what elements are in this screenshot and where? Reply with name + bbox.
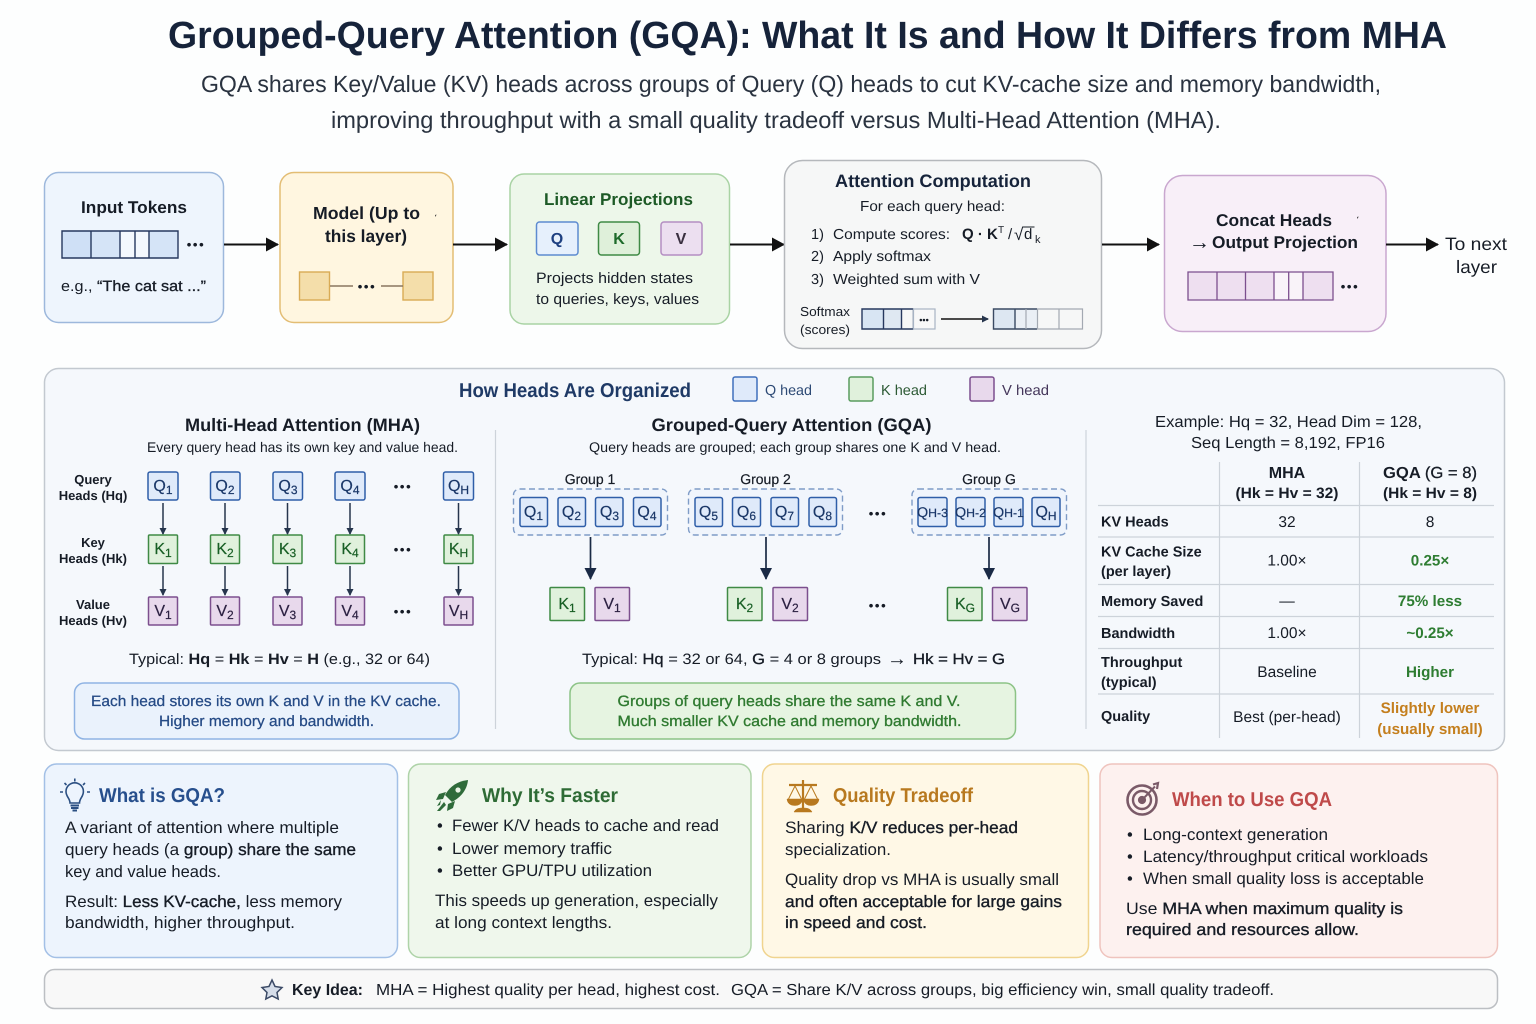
- legend: Q head: [765, 383, 812, 399]
- row: quality: [1101, 700, 1483, 738]
- row: KV heads: 32: [1278, 514, 1296, 531]
- body text: key and value heads.: [65, 863, 221, 881]
- label: to next layer: [1445, 234, 1507, 277]
- arrow: tokens to model: [224, 244, 278, 246]
- shared KV pair 1: 1: [569, 601, 576, 615]
- steps: Apply softmax: [833, 249, 932, 265]
- steps: d: [1024, 226, 1032, 243]
- card: quality tradeoff: Quality Tradeoff: [833, 785, 973, 807]
- legend: V head: [1002, 383, 1049, 399]
- group 1: 4: [650, 509, 657, 523]
- panel: linear projections: to queries, keys, values: [536, 291, 699, 308]
- section heading: How Heads Are Organized: [459, 380, 691, 402]
- body text: and often acceptable for large gains: [785, 893, 1062, 911]
- icon: star: [262, 980, 282, 999]
- steps: √: [1014, 225, 1024, 244]
- GQA callout: Groups of query heads share the same K and V.: [618, 693, 960, 710]
- panel: model up to this layer: Model (Up to: [313, 203, 420, 223]
- MHA value heads: •••: [394, 604, 412, 619]
- layer blocks: •••: [358, 279, 376, 294]
- key idea bar: GQA = Share K/V across groups, big efficiency win, small quality tradeoff.: [731, 982, 1274, 999]
- MHA key heads: [148, 535, 473, 564]
- GQA typical note: [582, 648, 1005, 670]
- row: KV heads: [1101, 514, 1434, 531]
- MHA column: Multi-Head Attention (MHA): [185, 415, 420, 435]
- icon: balance scales: [787, 780, 819, 812]
- subtitle: improving throughput with a small quality tradeoff versus Multi-Head Attention (MHA).: [331, 107, 1221, 133]
- row labels: Value: [76, 597, 110, 612]
- GQA callout: Much smaller KV cache and memory bandwidth.: [618, 713, 962, 730]
- softmax diagram: Softmax: [800, 304, 851, 319]
- MHA key heads: K: [449, 541, 460, 558]
- table header: [1236, 465, 1477, 502]
- MHA query heads: 2: [228, 483, 235, 497]
- MHA callout: Each head stores its own K and V in the KV cache.: [91, 693, 441, 710]
- body text: Quality drop vs MHA is usually small: [785, 871, 1059, 889]
- group G: QH-2: [955, 504, 986, 520]
- icon: target: [1128, 783, 1158, 814]
- key idea bar: MHA = Highest quality per head, highest cost.: [376, 982, 720, 999]
- row: memory saved: [1101, 593, 1462, 610]
- shared KV pair G: G: [1011, 601, 1020, 615]
- body text: bandwidth, higher throughput.: [65, 914, 295, 932]
- softmax diagram: •••: [919, 315, 929, 325]
- card: when to use GQA: [1100, 764, 1498, 958]
- Q K V chips: K: [613, 231, 625, 248]
- steps: /: [1008, 226, 1013, 243]
- MHA value heads: [148, 597, 473, 625]
- MHA query heads: Q: [448, 478, 460, 495]
- bullet list: •: [1127, 826, 1133, 844]
- shared KV pair 1: 1: [614, 601, 621, 615]
- MHA key heads: H: [460, 546, 468, 560]
- panel: model up to this layer: [280, 172, 453, 322]
- MHA value heads: V: [449, 603, 460, 620]
- bullet list: •: [1127, 848, 1133, 866]
- steps: 2): [811, 249, 824, 265]
- GQA column: Query heads are grouped; each group shares one K and V head.: [589, 439, 1001, 455]
- MHA query heads: 3: [291, 483, 298, 497]
- row: throughput: Higher: [1406, 664, 1454, 681]
- GQA column: •••: [869, 506, 887, 521]
- steps: [811, 225, 1041, 288]
- row labels: [59, 472, 127, 628]
- card: quality tradeoff: [762, 764, 1088, 958]
- row labels: Query: [74, 472, 113, 487]
- steps: 3): [811, 272, 824, 288]
- card: what is GQA: What is GQA?: [99, 785, 225, 807]
- label: to next layer: layer: [1456, 257, 1497, 277]
- row: KV heads: KV Heads: [1101, 514, 1169, 530]
- body text: specialization.: [785, 841, 891, 859]
- row labels: Heads (Hq): [59, 488, 127, 503]
- MHA value heads: 2: [227, 608, 234, 622]
- body text: [785, 819, 1062, 932]
- Q K V chips: [536, 222, 702, 255]
- MHA value heads: V: [216, 603, 227, 620]
- panel: concat heads: Concat Heads: [1216, 211, 1332, 230]
- MHA column: [59, 415, 474, 739]
- token bar: [62, 231, 205, 258]
- arrow: attention to concat: [1102, 244, 1159, 246]
- row: throughput: Throughput: [1101, 655, 1183, 671]
- group 2: [688, 471, 842, 535]
- GQA column: [514, 415, 1066, 739]
- row: throughput: Baseline: [1257, 664, 1317, 681]
- body text: This speeds up generation, especially: [435, 892, 719, 910]
- shared KV pair G: [948, 588, 1027, 620]
- GQA column: Grouped-Query Attention (GQA): [652, 415, 932, 435]
- softmax diagram: [800, 304, 1082, 337]
- steps: 1): [811, 227, 824, 243]
- example comparison table: [1098, 414, 1494, 738]
- MHA query heads: [148, 472, 474, 500]
- bullet list: Fewer K/V heads to cache and read: [452, 817, 719, 835]
- Q K V chips: Q: [551, 231, 563, 248]
- panel: linear projections: Projects hidden states: [536, 270, 693, 287]
- MHA value heads: 4: [352, 608, 359, 622]
- MHA query heads: •••: [394, 479, 412, 494]
- icon: rocket: [436, 780, 468, 811]
- group 1: Q: [637, 504, 650, 521]
- MHA callout: Higher memory and bandwidth.: [159, 713, 374, 730]
- legend: [733, 377, 1049, 401]
- body text: [1126, 900, 1403, 939]
- table header: (Hk = Hv = 8): [1383, 485, 1477, 502]
- row: bandwidth: 1.00×: [1267, 625, 1307, 642]
- panel: linear projections: [510, 174, 730, 324]
- MHA key heads: K: [341, 541, 352, 558]
- row: KV cache size: 0.25×: [1411, 552, 1449, 570]
- shared KV pair G: K: [955, 596, 966, 613]
- example comparison table: Example: Hq = 32, Head Dim = 128,: [1155, 414, 1422, 431]
- group G: QH-3: [917, 504, 948, 520]
- MHA query heads: H: [460, 483, 469, 497]
- panel: attention computation: Attention Computation: [835, 171, 1031, 191]
- panel: concat heads: Output Projection: [1212, 233, 1358, 252]
- GQA typical note: Typical: Hq = 32 or 64, G = 4 or 8 groups: [582, 651, 881, 668]
- row: quality: (usually small): [1377, 721, 1483, 738]
- bullet list: Long-context generation: [1143, 826, 1328, 844]
- group G: [912, 471, 1066, 535]
- body text: required and resources allow.: [1126, 921, 1359, 939]
- key idea bar: [44, 970, 1498, 1008]
- row: KV cache size: KV Cache Size: [1101, 544, 1202, 560]
- panel: concat heads: →: [1189, 231, 1210, 254]
- shared KV pair G: G: [966, 601, 975, 615]
- bullet list: •: [437, 840, 443, 858]
- icon: light bulb: [60, 778, 90, 810]
- panel: input tokens: e.g., “The cat sat ...”: [61, 278, 206, 295]
- shared KV pair 2: 2: [792, 601, 799, 615]
- MHA key heads: 1: [165, 546, 172, 560]
- bullet list: •: [437, 862, 443, 880]
- example comparison table: Seq Length = 8,192, FP16: [1191, 435, 1385, 452]
- row: memory saved: Memory Saved: [1101, 594, 1203, 610]
- group 2: Q: [699, 504, 711, 521]
- body text: Use MHA when maximum quality is: [1126, 900, 1403, 918]
- panel: how heads are organized: [44, 368, 1504, 750]
- group 1: Group 1: [565, 471, 616, 487]
- steps: k: [1035, 234, 1041, 246]
- group 1: 2: [574, 509, 581, 523]
- bullet list: •: [1127, 870, 1133, 888]
- MHA query heads: 1: [166, 483, 173, 497]
- shared KV pair 1: [550, 588, 630, 620]
- row: throughput: [1101, 655, 1454, 691]
- legend: K head: [881, 383, 927, 399]
- group arrows: [590, 537, 989, 579]
- body text: Result: Less KV-cache, less memory: [65, 893, 343, 911]
- body text: [65, 819, 356, 932]
- group G: Group G: [962, 471, 1016, 487]
- arrow: projections to attention: [730, 244, 784, 246]
- MHA key heads: 4: [352, 546, 359, 560]
- body text: Sharing K/V reduces per-head: [785, 819, 1018, 837]
- card: when to use GQA: When to Use GQA: [1172, 789, 1332, 811]
- steps: Weighted sum with V: [833, 272, 980, 288]
- row: KV heads: 8: [1426, 514, 1434, 531]
- row: KV cache size: [1101, 544, 1449, 580]
- title: Grouped-Query Attention (GQA): What It Is and How It Differs from MHA: [168, 15, 1447, 57]
- panel: attention computation: [784, 160, 1102, 348]
- row: bandwidth: Bandwidth: [1101, 626, 1175, 642]
- MHA query heads: Q: [153, 478, 166, 495]
- MHA query heads: Q: [278, 478, 291, 495]
- steps: Compute scores:: [833, 227, 950, 243]
- row: throughput: (typical): [1101, 675, 1157, 691]
- MHA query to key arrows: [163, 503, 458, 534]
- shared KV pair 1: K: [558, 596, 569, 613]
- arrow: model to projections: [453, 244, 507, 246]
- MHA value heads: 1: [165, 608, 172, 622]
- bullet list: Better GPU/TPU utilization: [452, 862, 652, 880]
- MHA callout: [74, 683, 459, 739]
- output bar: [1188, 272, 1359, 300]
- MHA query heads: Q: [215, 478, 228, 495]
- card: why it's faster: Why It’s Faster: [482, 785, 618, 807]
- bullet list: •: [437, 817, 443, 835]
- group 1: 1: [536, 509, 543, 523]
- panel: model up to this layer: this layer): [325, 226, 407, 246]
- MHA query heads: 4: [353, 483, 360, 497]
- panel: attention computation: For each query head:: [860, 199, 1005, 215]
- GQA callout: [570, 683, 1016, 739]
- panel: linear projections: Linear Projections: [544, 190, 693, 209]
- group 1: 3: [612, 509, 619, 523]
- MHA column: Every query head has its own key and value head.: [147, 439, 458, 455]
- group G: QH-1: [993, 504, 1024, 520]
- body text: at long context lengths.: [435, 914, 612, 932]
- group G: Q: [1035, 504, 1048, 521]
- shared KV pair 2: V: [781, 596, 792, 613]
- table header: (Hk = Hv = 32): [1236, 485, 1338, 502]
- row labels: Key: [81, 535, 106, 550]
- shared KV pair G: V: [1000, 596, 1011, 613]
- MHA value heads: V: [341, 603, 352, 620]
- body text: query heads (a group) share the same: [65, 841, 356, 859]
- card: why it's faster: [408, 764, 751, 958]
- group 2: 5: [711, 509, 718, 523]
- group 1: Q: [524, 504, 536, 521]
- subtitle: [201, 71, 1381, 133]
- bullet list: [437, 817, 719, 880]
- group 2: 7: [787, 509, 794, 523]
- row: bandwidth: [1101, 625, 1454, 642]
- group 2: 6: [749, 509, 756, 523]
- panel: input tokens: [44, 172, 224, 322]
- card: what is GQA: [44, 764, 398, 958]
- bullet list: Latency/throughput critical workloads: [1143, 848, 1428, 866]
- row: KV cache size: 1.00×: [1267, 552, 1307, 570]
- MHA value heads: V: [279, 603, 289, 620]
- output bar: •••: [1341, 279, 1359, 294]
- GQA typical note: →: [887, 648, 907, 670]
- MHA key heads: 2: [227, 546, 234, 560]
- key idea bar: Key Idea:: [292, 982, 363, 999]
- layer blocks: [300, 272, 433, 300]
- table header: MHA: [1269, 465, 1306, 482]
- arrow: to next layer: [1386, 244, 1438, 246]
- group 2: Q: [775, 504, 787, 521]
- row: memory saved: —: [1279, 593, 1295, 610]
- shared KV pair 2: 2: [746, 601, 753, 615]
- MHA value heads: H: [460, 608, 468, 622]
- shared KV pair 1: V: [603, 596, 614, 613]
- MHA query heads: Q: [340, 478, 353, 495]
- MHA typical note: Typical: Hq = Hk = Hv = H (e.g., 32 or 64): [129, 651, 430, 668]
- group 1: Q: [562, 504, 574, 521]
- token bar: •••: [187, 237, 205, 252]
- bullet list: Lower memory traffic: [452, 840, 612, 858]
- GQA column: •••: [869, 598, 887, 613]
- shared KV pair 2: [728, 588, 808, 620]
- MHA value heads: 3: [289, 608, 296, 622]
- row: quality: Best (per-head): [1233, 709, 1341, 726]
- panel: concat heads: [1164, 176, 1386, 332]
- steps: T: [998, 225, 1004, 236]
- MHA key heads: •••: [394, 542, 412, 557]
- body text: [435, 892, 719, 932]
- bullet list: [1127, 826, 1428, 888]
- row: quality: Quality: [1101, 709, 1150, 725]
- row: memory saved: 75% less: [1398, 593, 1462, 610]
- MHA key heads: K: [216, 541, 227, 558]
- group 1: Q: [600, 504, 612, 521]
- GQA typical note: Hk = Hv = G: [913, 651, 1005, 668]
- MHA key to value arrows: [163, 566, 458, 595]
- group 1: [514, 471, 668, 535]
- group 2: Group 2: [740, 471, 791, 487]
- subtitle: GQA shares Key/Value (KV) heads across groups of Query (Q) heads to cut KV-cache size and memory bandwidth,: [201, 71, 1381, 97]
- softmax diagram: (scores): [800, 322, 850, 337]
- body text: in speed and cost.: [785, 914, 927, 932]
- MHA value heads: V: [154, 603, 165, 620]
- body text: A variant of attention where multiple: [65, 819, 339, 837]
- row labels: Heads (Hk): [59, 551, 127, 566]
- group 2: Q: [813, 504, 825, 521]
- table header: GQA (G = 8): [1383, 465, 1477, 482]
- shared KV pair 2: K: [736, 596, 746, 613]
- MHA key heads: K: [279, 541, 289, 558]
- row: quality: Slightly lower: [1381, 700, 1479, 717]
- row: bandwidth: ~0.25×: [1406, 625, 1454, 642]
- bullet list: When small quality loss is acceptable: [1143, 870, 1424, 888]
- group 2: Q: [737, 504, 749, 521]
- panel: input tokens: Input Tokens: [81, 198, 187, 217]
- group G: H: [1048, 509, 1057, 523]
- Q K V chips: V: [676, 231, 687, 248]
- group 2: 8: [825, 509, 832, 523]
- row: KV cache size: (per layer): [1101, 564, 1171, 580]
- steps: Q · K: [962, 226, 998, 243]
- MHA key heads: 3: [289, 546, 296, 560]
- row labels: Heads (Hv): [59, 613, 127, 628]
- label: to next layer: To next: [1445, 234, 1507, 254]
- MHA key heads: K: [154, 541, 165, 558]
